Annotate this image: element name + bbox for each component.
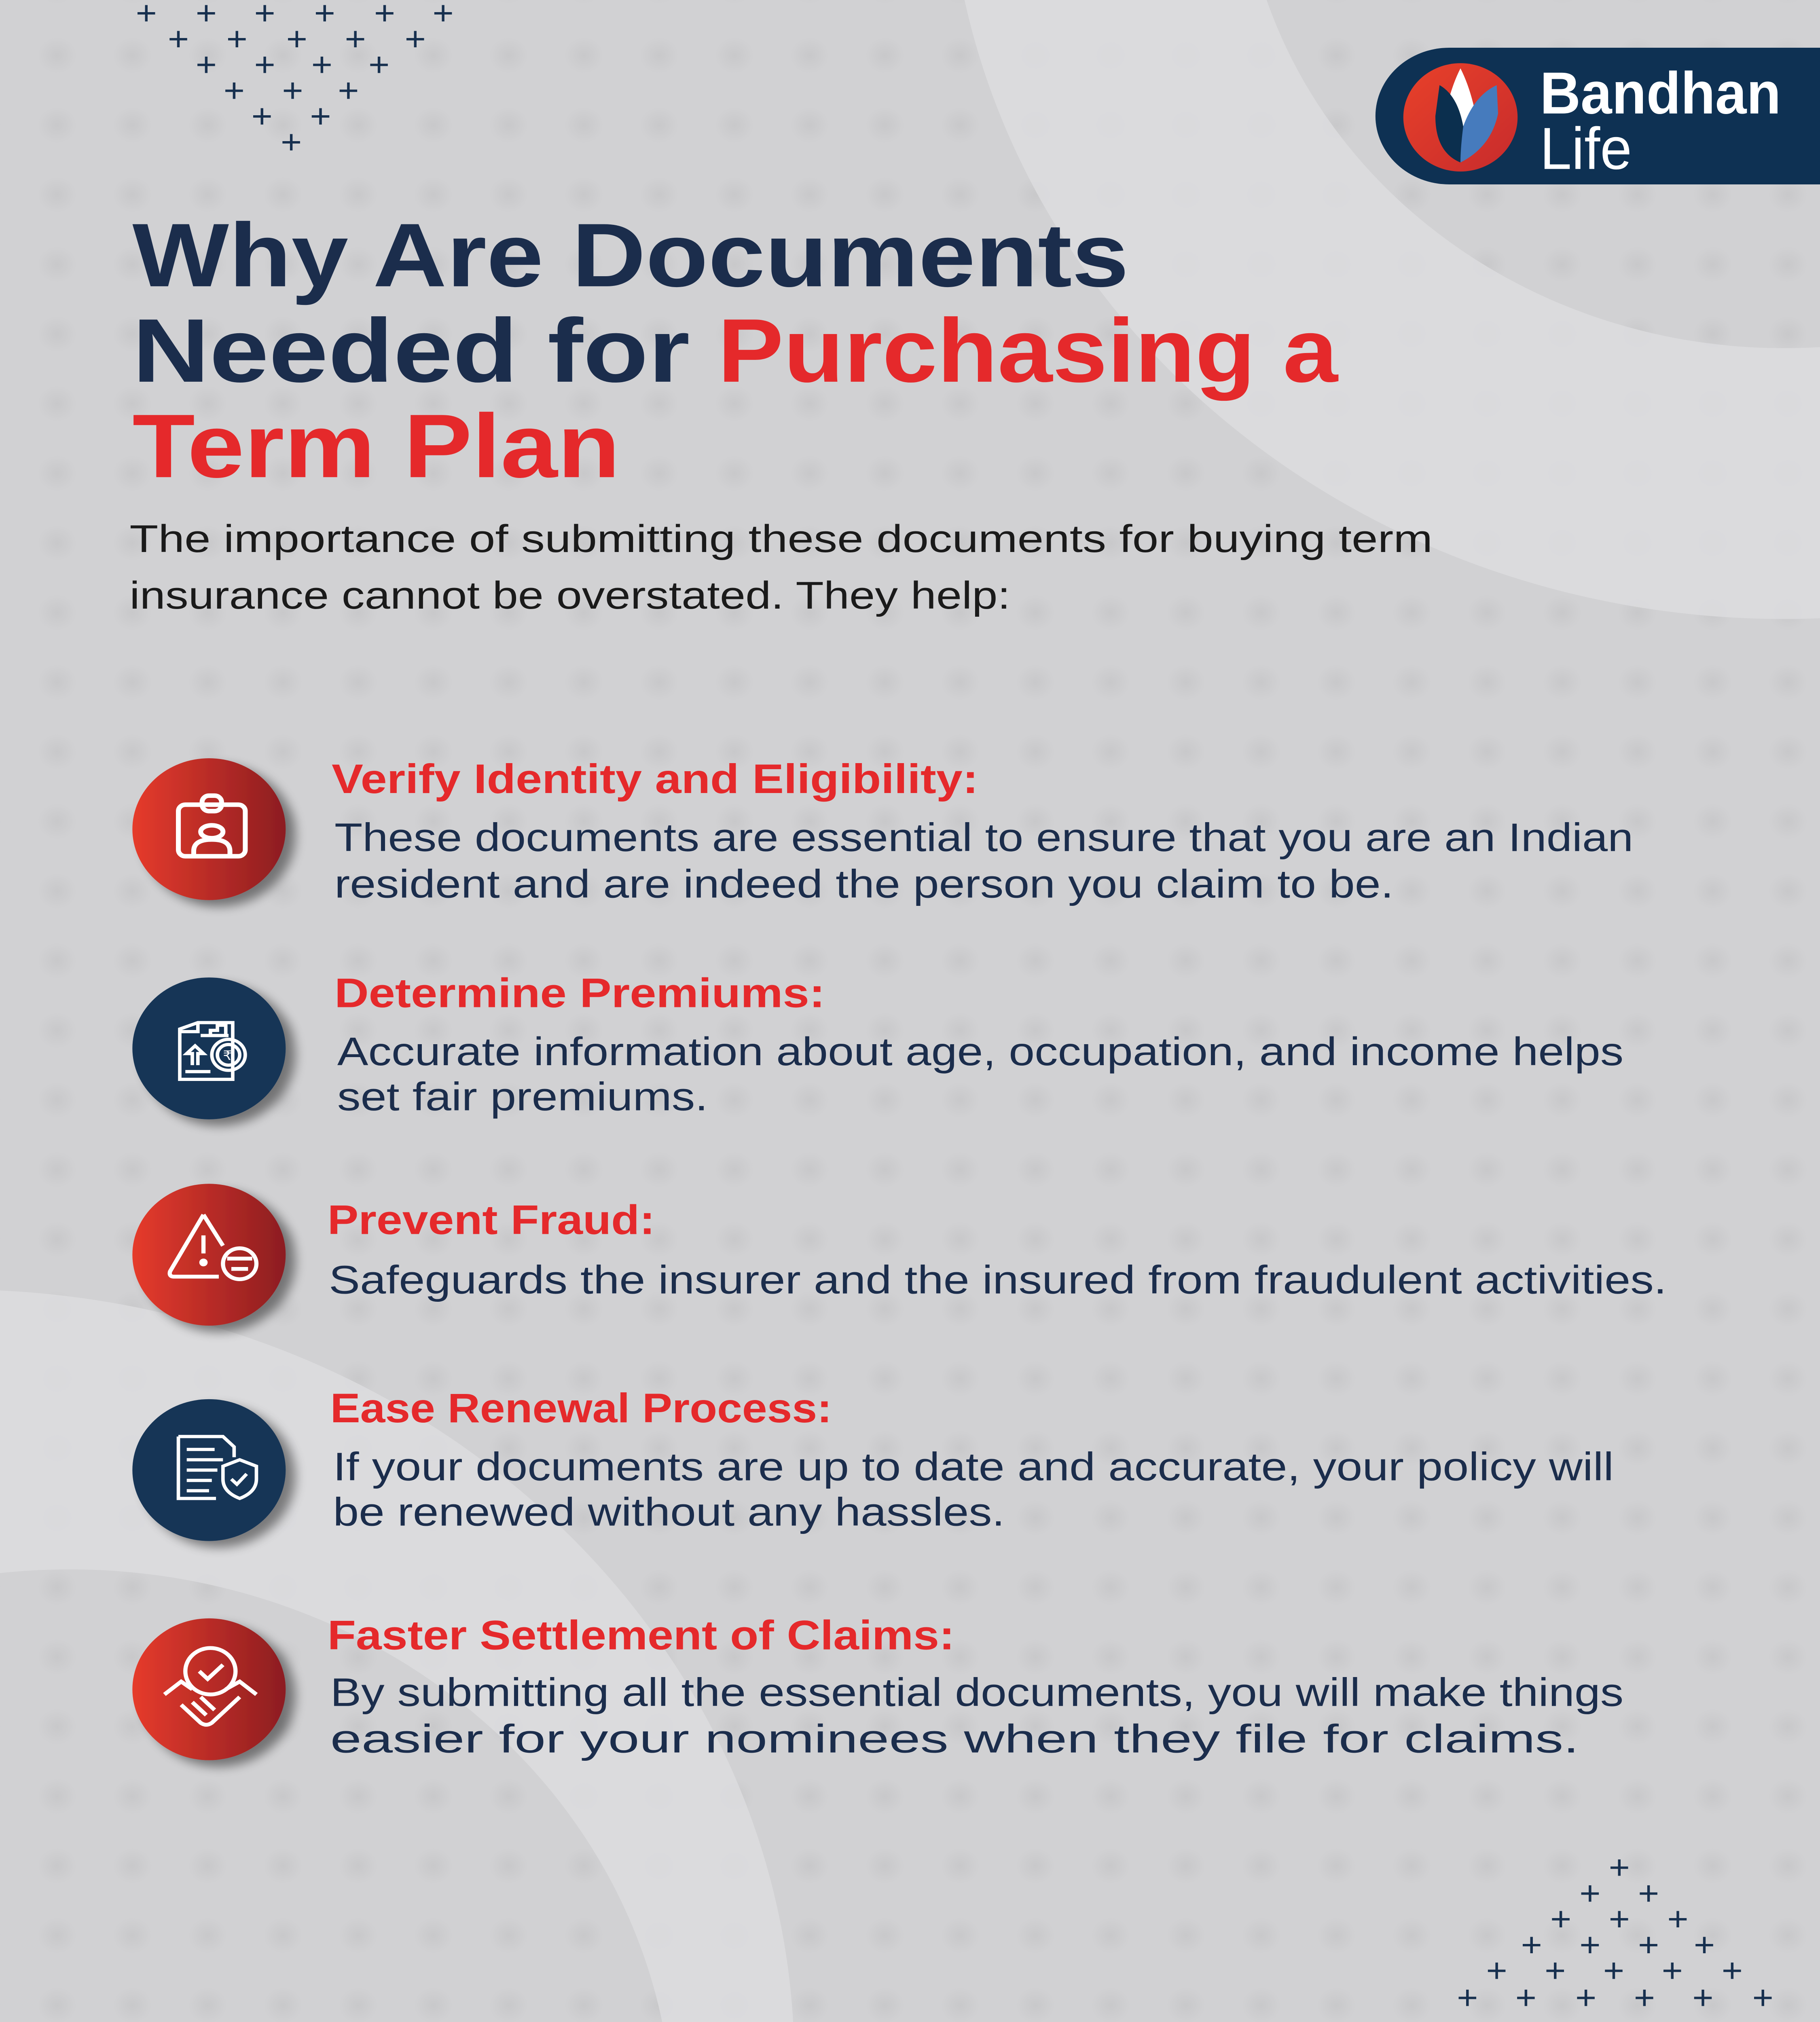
icon: handshake with check <box>132 1618 286 1760</box>
plus pattern bottom right: + <box>1550 1901 1571 1938</box>
plus pattern bottom right: + <box>1575 1979 1596 2016</box>
plus pattern top left: + <box>338 72 359 109</box>
icon: logo emblem <box>1403 63 1517 171</box>
plus pattern bottom right: + <box>1579 1926 1601 1964</box>
item 1: verify identity: resident and are indeed the person you claim to be. <box>334 861 1394 906</box>
plus pattern bottom right: + <box>1545 1952 1566 1989</box>
plus pattern top left: + <box>310 98 331 135</box>
item 4: ease renewal <box>132 1385 1614 1541</box>
item 2: determine premiums <box>132 970 1623 1119</box>
plus pattern bottom right: + <box>1722 1952 1743 1989</box>
item 2: determine premiums: Determine Premiums: <box>334 970 825 1016</box>
title: Purchasing a <box>718 300 1339 401</box>
item 1: verify identity <box>132 756 1633 906</box>
decorative ring top right <box>948 0 1820 619</box>
item 3: prevent fraud <box>132 1184 1667 1326</box>
plus pattern bottom right: + <box>1634 1979 1655 2016</box>
item 1: verify identity: Verify Identity and Eligibility: <box>332 756 978 802</box>
plus pattern top left: + <box>196 46 217 83</box>
plus pattern bottom right: + <box>1515 1979 1536 2016</box>
plus pattern bottom right: + <box>1752 1979 1773 2016</box>
plus pattern bottom right: + <box>1638 1875 1659 1912</box>
plus pattern top left: + <box>224 72 245 109</box>
plus pattern bottom right: + <box>1662 1952 1683 1989</box>
intro text: insurance cannot be overstated. They help: <box>129 574 1010 617</box>
plus pattern bottom right: + <box>1609 1849 1630 1886</box>
intro text <box>129 517 1433 617</box>
plus pattern top left: + <box>405 20 426 58</box>
plus pattern top left: + <box>281 124 302 161</box>
plus pattern top left: + <box>226 20 248 58</box>
title <box>132 205 1339 497</box>
plus pattern top left: + <box>252 98 273 135</box>
plus pattern top left: + <box>254 46 275 83</box>
plus pattern top left <box>136 0 454 161</box>
plus pattern top left: + <box>286 20 307 58</box>
item 3: prevent fraud: Safeguards the insurer and the insured from fraudulent activities. <box>329 1257 1667 1302</box>
plus pattern bottom right: + <box>1667 1901 1689 1938</box>
item 4: ease renewal: Ease Renewal Process: <box>330 1385 832 1431</box>
title: Why Are Documents <box>132 205 1129 306</box>
item 5: faster claims <box>132 1612 1623 1761</box>
icon: id card <box>132 758 286 900</box>
logo: Bandhan Life: Bandhan <box>1540 60 1781 126</box>
intro text: The importance of submitting these documents for buying term <box>129 517 1433 560</box>
logo: Bandhan Life <box>1376 48 1820 184</box>
logo: Bandhan Life: Life <box>1540 116 1632 182</box>
item 4: ease renewal: be renewed without any hassles. <box>333 1489 1005 1534</box>
plus pattern top left: + <box>345 20 366 58</box>
plus pattern bottom right: + <box>1521 1926 1542 1964</box>
plus pattern bottom right: + <box>1579 1875 1601 1912</box>
item 5: faster claims: By submitting all the essential documents, you will make things <box>330 1670 1623 1715</box>
title: Needed for <box>132 300 690 401</box>
plus pattern bottom right: + <box>1486 1952 1507 1989</box>
plus pattern top left: + <box>368 46 389 83</box>
item 2: determine premiums: Accurate information about age, occupation, and income helps <box>337 1029 1623 1074</box>
plus pattern bottom right: + <box>1638 1926 1659 1964</box>
item 2: determine premiums: ₹ <box>223 1049 232 1063</box>
decorative ring bottom left <box>0 1290 794 2022</box>
plus pattern bottom right: + <box>1603 1952 1624 1989</box>
plus pattern bottom right: + <box>1609 1901 1630 1938</box>
item 4: ease renewal: If your documents are up to date and accurate, your policy will <box>333 1444 1614 1489</box>
item 2: determine premiums: set fair premiums. <box>337 1074 708 1119</box>
item 1: verify identity: These documents are essential to ensure that you are an Indian <box>334 815 1633 860</box>
icon: warning with hacker <box>132 1184 286 1326</box>
plus pattern top left: + <box>282 72 303 109</box>
plus pattern bottom right: + <box>1694 1926 1715 1964</box>
plus pattern top left: + <box>168 20 189 58</box>
icon: report with rupee coin <box>132 977 286 1119</box>
plus pattern top left: + <box>311 46 332 83</box>
plus pattern bottom right: + <box>1457 1979 1478 2016</box>
plus pattern bottom right <box>1457 1849 1773 2016</box>
plus pattern bottom right: + <box>1692 1979 1714 2016</box>
item 3: prevent fraud: Prevent Fraud: <box>328 1197 655 1243</box>
title: Term Plan <box>132 396 620 497</box>
icon: document with shield <box>132 1399 286 1541</box>
item 5: faster claims: easier for your nominees when they file for claims. <box>330 1716 1579 1761</box>
item 5: faster claims: Faster Settlement of Claims: <box>328 1612 954 1658</box>
